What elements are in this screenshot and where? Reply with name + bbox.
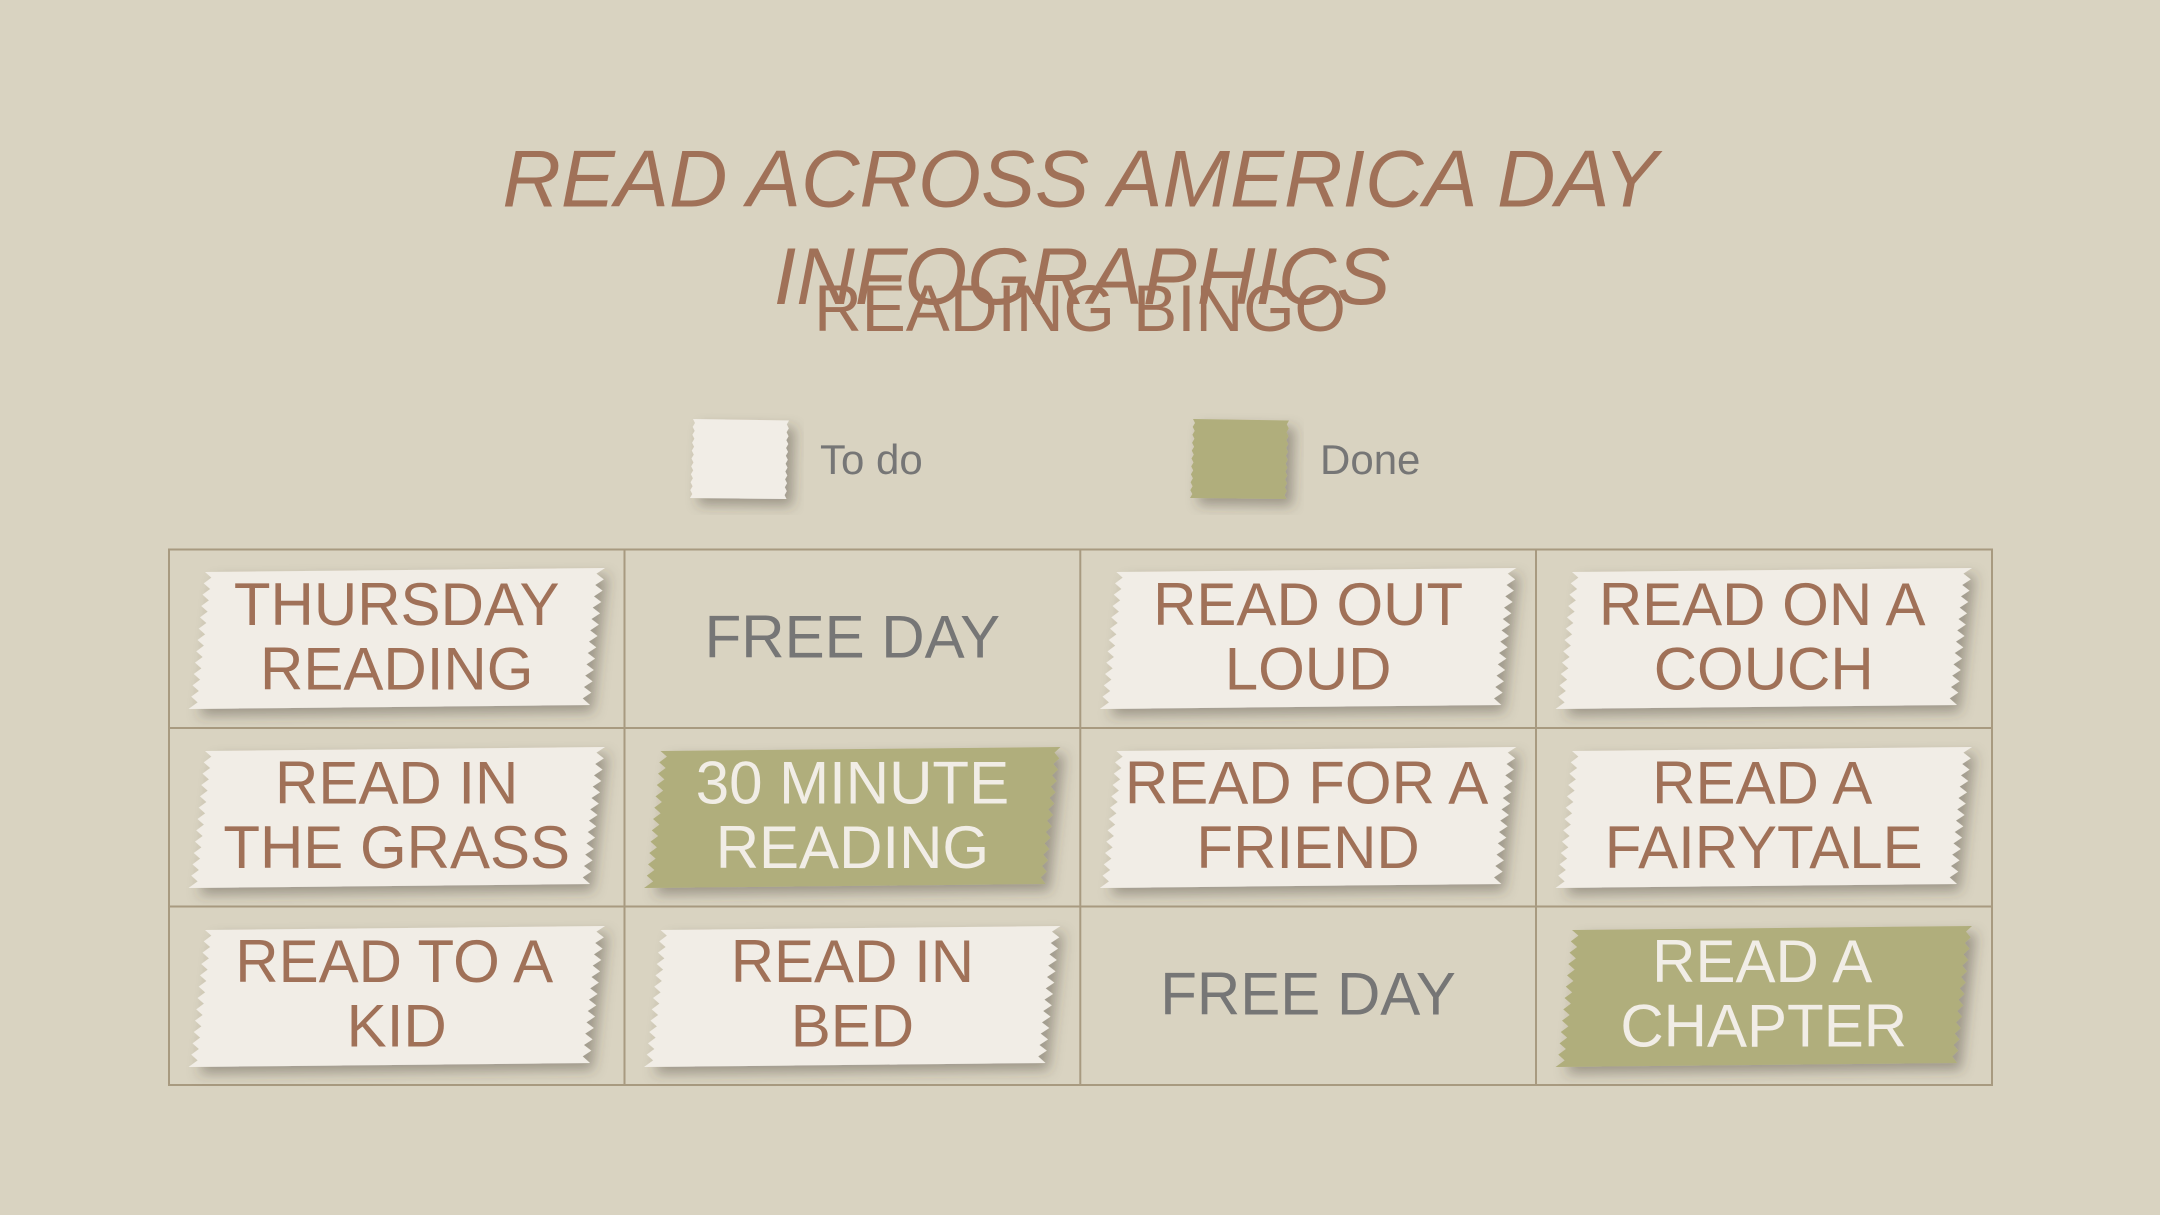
subtitle: READING BINGO xyxy=(814,271,1346,345)
legend swatch: to do xyxy=(690,419,789,499)
cell: read a fairytale xyxy=(1556,747,1972,888)
tape xyxy=(1100,568,1516,709)
cell label: 30 MINUTE xyxy=(696,750,1009,816)
cell: free day: FREE DAY xyxy=(1160,960,1456,1028)
legend: done xyxy=(1190,419,1420,499)
cell label: KID xyxy=(347,993,447,1060)
cell label: THE GRASS xyxy=(223,814,570,881)
cell: free day: FREE DAY xyxy=(705,604,1000,670)
cell: read for a friend xyxy=(1100,747,1516,888)
cell: read to a kid xyxy=(188,926,605,1067)
tape xyxy=(188,747,605,888)
cell label: READ FOR A xyxy=(1125,750,1488,816)
cell: read out loud xyxy=(1100,568,1516,709)
tape xyxy=(188,926,605,1067)
cell: read in bed xyxy=(644,926,1060,1067)
cell: thursday reading xyxy=(188,568,605,709)
cell label: READ A xyxy=(1652,928,1872,995)
legend label: done: Done xyxy=(1320,436,1420,483)
cell label: COUCH xyxy=(1654,636,1874,703)
cell label: BED xyxy=(791,993,914,1060)
cell: read a chapter (done) xyxy=(1556,926,1972,1067)
bingo grid lines xyxy=(169,550,1992,1085)
legend swatch: done xyxy=(1190,419,1289,499)
tape xyxy=(1556,747,1972,888)
tape xyxy=(1100,747,1516,888)
cell label: READ TO A xyxy=(235,928,553,995)
title second line: INFOGRAPHICS xyxy=(774,232,1390,322)
cell label: LOUD xyxy=(1225,636,1391,703)
title: READ ACROSS AMERICA DAY xyxy=(502,134,1663,224)
cell label: READ A xyxy=(1652,750,1872,816)
legend: to do xyxy=(690,419,923,499)
cell label: READ OUT xyxy=(1153,571,1463,638)
tape xyxy=(188,568,605,709)
cell label: READING xyxy=(716,814,989,881)
cell label: THURSDAY xyxy=(234,571,559,638)
cell label: READ IN xyxy=(731,928,974,995)
tape xyxy=(1556,926,1972,1067)
cell: 30 minute reading (done) xyxy=(644,747,1060,888)
cell label: FAIRYTALE xyxy=(1605,814,1923,881)
legend label: to do: To do xyxy=(820,436,923,483)
cell: read on a couch xyxy=(1556,568,1972,709)
cell label: FRIEND xyxy=(1196,814,1420,881)
cell label: CHAPTER xyxy=(1620,993,1907,1060)
cell label: READ IN xyxy=(275,750,518,816)
cell label: READ ON A xyxy=(1599,571,1926,638)
cell label: READING xyxy=(260,636,533,703)
cell: read in the grass xyxy=(188,747,605,888)
tape xyxy=(1556,568,1972,709)
tape xyxy=(644,747,1060,888)
tape xyxy=(644,926,1060,1067)
